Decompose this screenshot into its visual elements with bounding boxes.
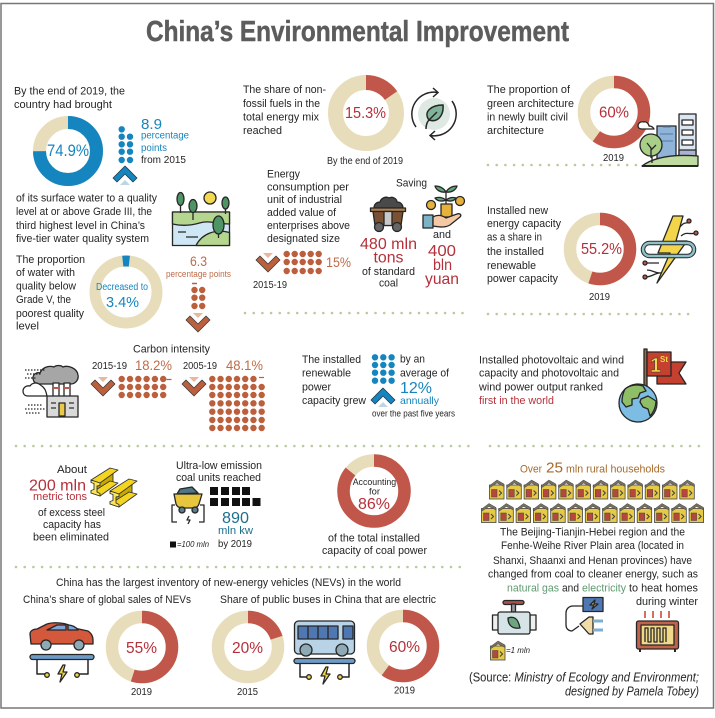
donut 74.9% — [40, 122, 96, 180]
2015-19 18.2%: 18.2% — [135, 357, 172, 373]
description: Shanxi, Shaanxi and Henan provinces) have — [493, 555, 692, 567]
890 mln kw: 890 — [222, 510, 249, 527]
caption 2019: 2019 — [131, 687, 152, 698]
description — [29, 464, 109, 544]
icon: mine cart — [172, 487, 204, 524]
water description: of its surface water to a quality — [16, 193, 157, 205]
description: Installed new — [487, 205, 548, 217]
description: The installed — [302, 354, 361, 366]
description: About — [57, 464, 87, 476]
donut 15.3%: 15.3% — [345, 105, 386, 122]
2005-19 48.1%: 48.1% — [226, 357, 263, 373]
icon: flag and globe: 1 — [650, 355, 661, 377]
description text: poorest quality — [16, 308, 84, 320]
890 mln kw: mln kw — [218, 525, 253, 537]
panel: non-fossil fuels — [243, 82, 456, 167]
description: metric tons — [33, 491, 87, 503]
dots and up chevron — [371, 357, 395, 407]
source credit — [469, 670, 699, 699]
description: consumption per — [267, 182, 349, 194]
intro text: country had brought — [14, 99, 112, 111]
description: power capacity — [487, 273, 558, 285]
dots and up chevron — [113, 129, 137, 185]
legend: =100 mln — [177, 540, 210, 549]
description — [487, 84, 574, 137]
heading — [176, 460, 262, 484]
water description — [16, 193, 157, 245]
2005-19 48.1% — [182, 357, 264, 428]
and 400 bln yuan: yuan — [425, 271, 459, 288]
2015-19 18.2%: 2015-19 — [92, 361, 127, 372]
description: energy capacity — [487, 218, 561, 230]
description: during winter — [636, 596, 698, 608]
donut 86%: Accounting — [353, 477, 396, 488]
donut 3.4%: Decreased to — [96, 282, 148, 293]
description — [243, 84, 326, 137]
description: fossil fuels in the — [243, 98, 320, 110]
description — [478, 354, 624, 407]
8.9 percentage points — [141, 116, 189, 166]
description text: The proportion — [16, 254, 85, 266]
caption: capacity of coal power — [322, 545, 427, 557]
icon: steel beams — [91, 468, 137, 507]
icon: electric car — [30, 623, 94, 682]
heading: mln rural households — [566, 464, 665, 476]
heading: Over — [520, 464, 542, 476]
panel: green architecture — [487, 82, 698, 166]
icon: hand with plant and coins — [423, 186, 464, 228]
donut 60% buses — [373, 616, 433, 676]
description text: Grade V, the — [16, 294, 71, 306]
donut 15.3% — [336, 82, 396, 144]
donut 86%: 86% — [358, 496, 390, 513]
caption: By the end of 2019 — [327, 156, 403, 167]
donut 3.4% — [92, 258, 160, 326]
description: reached — [243, 125, 282, 137]
water description: level at or above Grade III, the — [16, 206, 152, 218]
heading: Carbon intensity — [133, 344, 210, 356]
description text: of water with — [16, 267, 75, 279]
12% annually: 12% — [400, 380, 432, 397]
squares unit chart — [210, 487, 260, 506]
icon: plug — [566, 598, 603, 634]
12% annually: over the past five years — [372, 409, 455, 419]
6.3 percentage points: 6.3 — [190, 253, 207, 269]
and 400 bln yuan: bln — [433, 257, 452, 274]
description — [487, 205, 561, 285]
description: electricity — [582, 583, 626, 595]
and 400 bln yuan: 400 — [428, 243, 456, 260]
intro text — [14, 86, 125, 111]
donut 55.2%: 55.2% — [581, 241, 622, 258]
panel: share of coal power — [322, 460, 427, 557]
description: enterprises above — [267, 220, 350, 232]
title: China’s Environmental Improvement — [146, 16, 569, 48]
icon: lightning with connectors — [643, 216, 698, 283]
saving label: Saving — [396, 178, 427, 190]
icon: heater — [636, 611, 678, 652]
description: added value of — [267, 207, 337, 219]
480 mln tons: tons — [374, 250, 404, 267]
description: renewable — [302, 368, 351, 380]
description: capacity and photovoltaic and — [479, 368, 619, 380]
donut 86%: for — [369, 486, 380, 497]
icon: factory and clouds — [23, 366, 78, 417]
description: Energy — [267, 169, 300, 181]
donut 55% — [112, 617, 172, 677]
8.9 percentage points: from 2015 — [141, 155, 186, 166]
480 mln tons: coal — [379, 278, 398, 290]
8.9 percentage points: points — [141, 143, 167, 154]
heading: coal units reached — [176, 472, 261, 484]
480 mln tons: of standard — [362, 266, 415, 278]
panel: below Grade V water — [16, 253, 231, 332]
description: unit of industrial — [267, 194, 342, 206]
description: 200 mln — [29, 478, 86, 495]
12% annually: annually — [400, 395, 440, 407]
legend: house equals 1 mln — [490, 641, 531, 660]
6.3 percentage points — [166, 253, 231, 280]
panel: excess steel — [29, 464, 137, 544]
description: designated size — [267, 233, 340, 245]
and 400 bln yuan: and — [433, 229, 451, 241]
description — [267, 169, 350, 245]
panel: surface water quality — [14, 86, 230, 246]
intro text: By the end of 2019, the — [14, 86, 125, 98]
donut 20% — [218, 617, 278, 677]
legend: house equals 1 mln: =1 mln — [506, 646, 531, 655]
480 mln tons — [360, 236, 417, 290]
description text: level — [16, 320, 39, 332]
description: changed from coal to cleaner energy, such as — [488, 569, 698, 581]
donut 60%: 60% — [599, 105, 629, 122]
description text: quality below — [16, 280, 76, 292]
heading: Ultra-low emission — [176, 460, 262, 472]
panel: rural households — [481, 460, 704, 660]
caption: of the total installed — [328, 533, 420, 545]
description: wind power output ranked — [478, 382, 603, 394]
890 mln kw — [218, 510, 253, 550]
panel: energy consumption — [253, 169, 464, 291]
icon: landscape — [172, 192, 230, 246]
description: to heat homes — [629, 583, 698, 595]
panel: new energy capacity — [487, 205, 698, 303]
panel: ultra-low emission coal — [170, 460, 262, 550]
description: capacity has — [43, 519, 101, 531]
description — [488, 527, 698, 608]
donut 74.9%: 74.9% — [47, 142, 89, 160]
donut 86% — [344, 460, 404, 522]
description: total energy mix — [243, 112, 319, 124]
donut 60% — [584, 82, 644, 142]
caption — [322, 533, 427, 557]
chevron and dots 15% — [256, 253, 351, 272]
panel: first in the world — [478, 349, 686, 422]
heading — [520, 460, 665, 477]
description: power — [302, 382, 331, 394]
description: first in the world — [479, 395, 554, 407]
donut 3.4%: 3.4% — [106, 294, 139, 311]
description — [302, 354, 366, 407]
panel: NEV section — [23, 577, 436, 698]
house pictogram rows — [481, 480, 704, 522]
description: of excess steel — [38, 507, 105, 519]
description: been eliminated — [33, 532, 109, 544]
icon: gas valve — [492, 600, 536, 634]
description: renewable — [487, 260, 536, 272]
2015-19 18.2% — [91, 357, 172, 396]
icon: electric bus — [294, 621, 355, 684]
description: natural gas — [507, 583, 559, 595]
description: in newly built civil — [487, 112, 568, 124]
description: Fenhe-Weihe River Plain area (located in — [501, 540, 684, 552]
caption 2019: 2019 — [589, 292, 610, 303]
heading: 25 — [546, 460, 563, 477]
caption 2015-19: 2015-19 — [253, 280, 287, 291]
12% annually: by an — [400, 354, 425, 366]
12% annually: average of — [400, 368, 450, 380]
description: The proportion of — [487, 84, 571, 96]
icon: leaf in cycle arrows — [412, 88, 456, 140]
description: The share of non- — [243, 84, 326, 96]
water description: third highest level in China’s — [16, 220, 145, 232]
panel: renewable capacity growth — [302, 354, 455, 419]
icon: flag and globe — [619, 349, 686, 422]
description: green architecture — [487, 98, 574, 110]
8.9 percentage points: 8.9 — [141, 116, 162, 133]
subheading: buses: Share of public buses in China that are electric — [220, 594, 436, 606]
description: Installed photovoltaic and wind — [479, 354, 624, 366]
icon: coal cart — [370, 197, 406, 232]
890 mln kw: by 2019 — [218, 539, 252, 550]
panel: carbon intensity — [23, 344, 264, 428]
12% annually — [372, 354, 455, 419]
heading: China has the largest inventory of new-energy vehicles (NEVs) in the world — [56, 577, 401, 589]
subheading: global sales: China’s share of global sales of NEVs — [23, 594, 191, 606]
icon: green buildings — [638, 114, 698, 166]
description: architecture — [487, 125, 544, 137]
description: capacity grew — [302, 395, 366, 407]
caption 2019: 2019 — [603, 153, 624, 164]
caption 2015: 2015 — [237, 687, 258, 698]
donut 55.2% — [570, 219, 630, 279]
8.9 percentage points: percentage — [141, 130, 189, 142]
description: the installed — [487, 246, 544, 258]
chevron and dots 15%: 15% — [326, 254, 351, 270]
donut 55%: 55% — [126, 640, 157, 657]
donut 20%: 20% — [232, 640, 263, 657]
6.3 percentage points: percentage points — [166, 269, 231, 280]
water description: five-tier water quality system — [16, 233, 149, 245]
480 mln tons: 480 mln — [360, 236, 417, 253]
dots and down chevron — [186, 284, 210, 332]
description: as a share in — [487, 232, 542, 244]
description: The Beijing-Tianjin-Hebei region and the — [500, 527, 685, 539]
2005-19 48.1%: 2005-19 — [183, 361, 217, 372]
donut 60% buses: 60% — [389, 639, 420, 656]
description text — [16, 254, 85, 332]
icon: flag and globe: St — [660, 355, 668, 364]
description: and — [562, 583, 579, 595]
caption 2019: 2019 — [394, 686, 415, 697]
and 400 bln yuan — [425, 229, 459, 288]
